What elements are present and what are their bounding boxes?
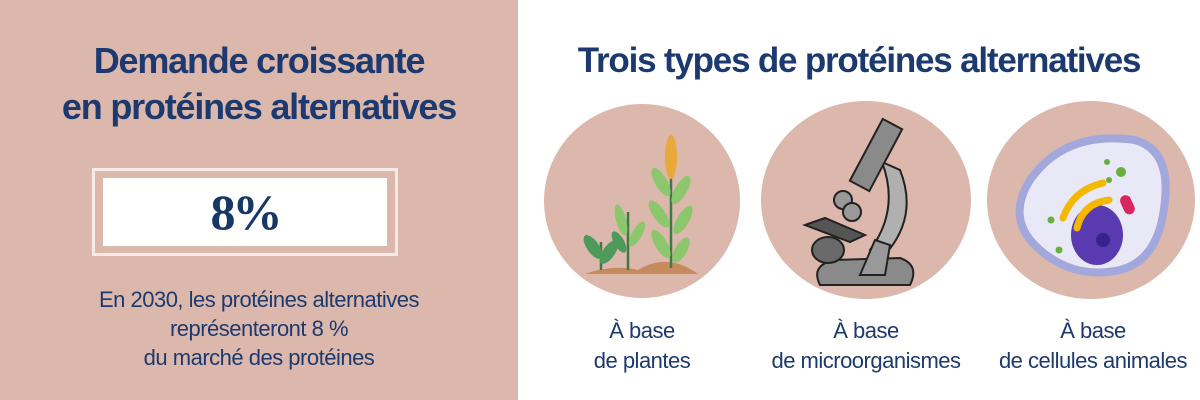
icon: animal cell: [987, 101, 1195, 299]
description text: En 2030, les protéines alternatives: [99, 287, 419, 312]
description text: du marché des protéines: [144, 345, 374, 370]
title right: Trois types de protéines alternatives: [578, 41, 1140, 80]
description text: [99, 287, 419, 370]
title left: en protéines alternatives: [62, 86, 456, 127]
icon: plant: [544, 104, 740, 298]
label: cellules animales: À base: [1060, 318, 1126, 343]
label: microorganismes: [771, 318, 961, 373]
label: microorganismes: À base: [833, 318, 899, 343]
label: plantes: de plantes: [594, 348, 690, 373]
label: plantes: [594, 318, 690, 373]
stat box 8%: [92, 168, 398, 256]
title left: Demande croissante: [94, 40, 424, 81]
description text: représenteront 8 %: [170, 316, 348, 341]
label: microorganismes: de microorganismes: [771, 348, 961, 373]
label: plantes: À base: [609, 318, 675, 343]
stat box 8%: 8%: [210, 184, 280, 240]
title left: [62, 40, 456, 127]
icon: microscope: [761, 101, 971, 299]
panel: left demand: [0, 0, 518, 400]
label: cellules animales: de cellules animales: [999, 348, 1187, 373]
label: cellules animales: [999, 318, 1187, 373]
